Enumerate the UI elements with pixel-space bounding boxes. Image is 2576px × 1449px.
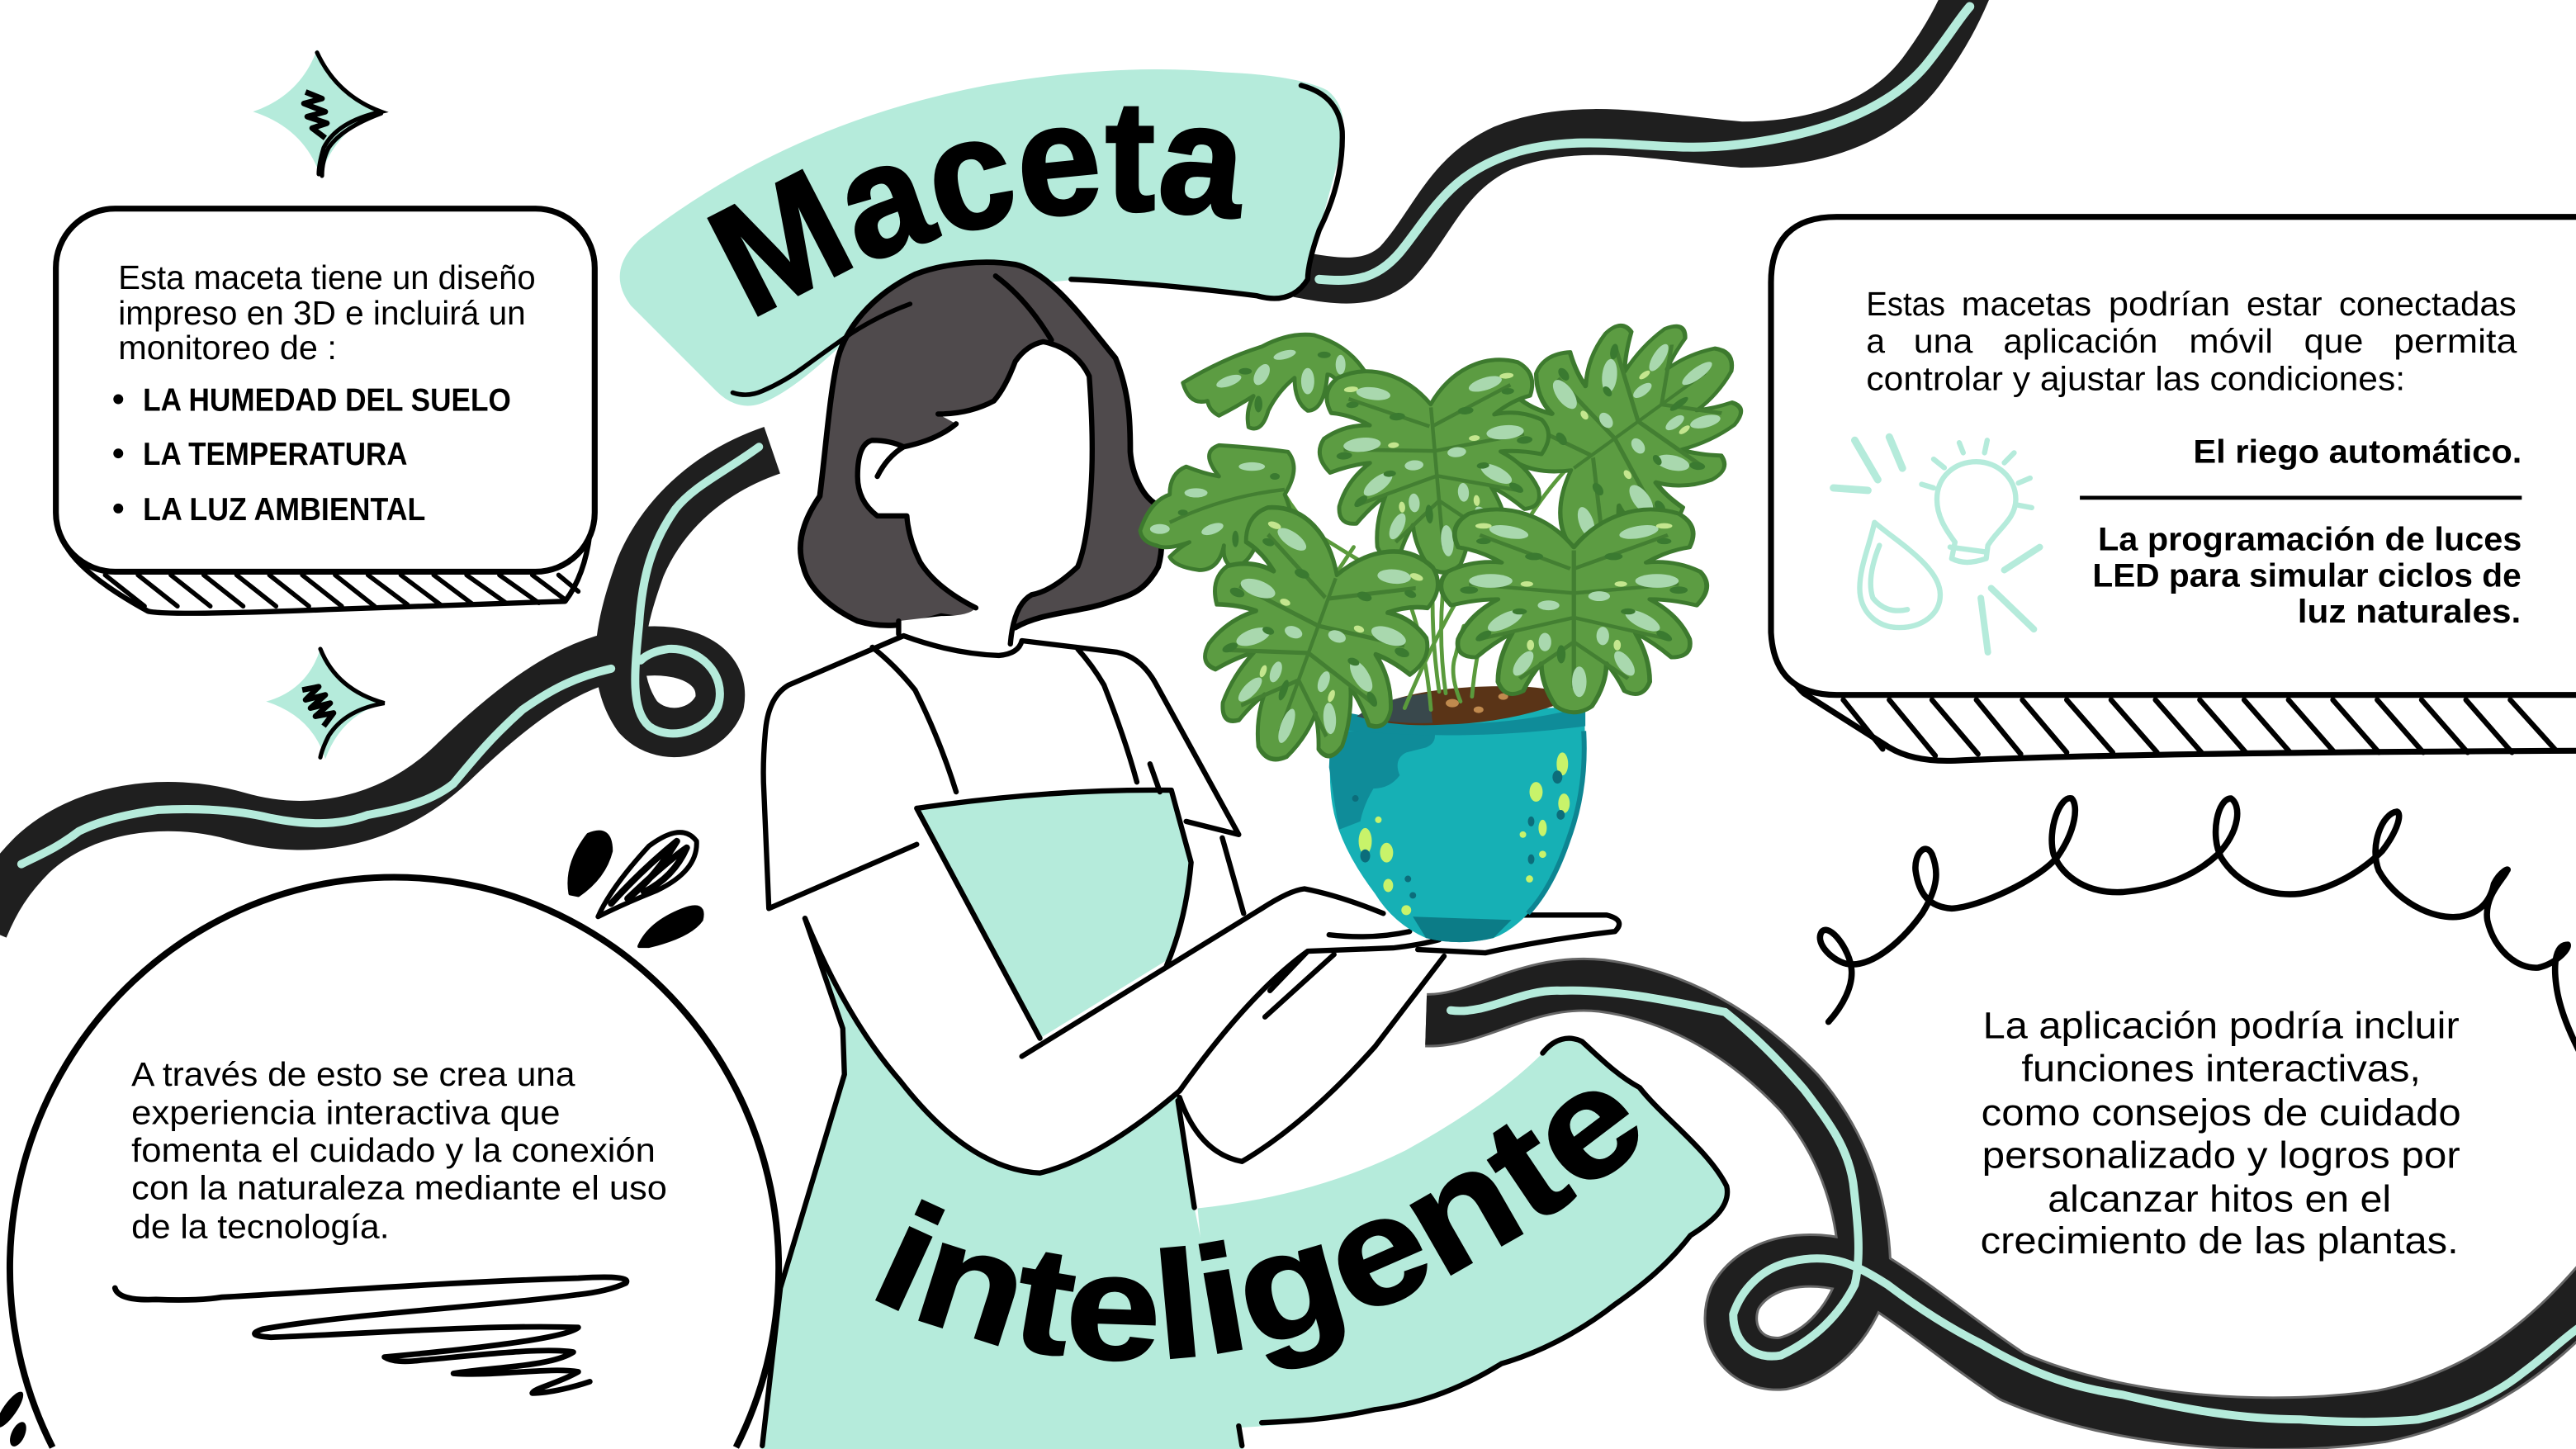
right arm fill [1180, 953, 1444, 1162]
text: app features: La aplicación podría incluir [1983, 1005, 2460, 1047]
title word: inteligente: inteligente [875, 1091, 1638, 1369]
text: circle paragraph: experiencia interactiva que [131, 1094, 561, 1132]
text: left box intro: Esta maceta tiene un diseño [118, 258, 536, 296]
shirt and arm lines [764, 636, 1243, 913]
scribble underline [115, 1277, 627, 1393]
apron [760, 918, 1243, 1449]
list: monitoring items: LA TEMPERATURA [143, 437, 407, 472]
leaf: middle left [1140, 445, 1294, 570]
star: top [253, 50, 381, 176]
face [858, 342, 1092, 652]
leaf: top left [1183, 334, 1364, 429]
banner line over hair [732, 304, 910, 395]
text: LED lights: La programación de luces [2098, 522, 2522, 558]
text: left box intro [118, 258, 536, 367]
list: monitoring items: LA LUZ AMBIENTAL [143, 492, 425, 528]
ribbon: left with loop [0, 447, 772, 928]
stems [1285, 370, 1569, 710]
text: app features: personalizado y logros por [1982, 1134, 2460, 1177]
hair and face lines [858, 276, 1092, 644]
leaf: top right [1474, 272, 1790, 580]
text: circle paragraph: de la tecnología. [131, 1207, 390, 1245]
ribbon: top right [1298, 0, 1970, 281]
text: right box intro: una [1914, 322, 1973, 360]
pot [1329, 707, 1585, 942]
bib [916, 790, 1191, 1042]
panel: circle text [10, 877, 779, 1447]
text: circle paragraph: A través de esto se crea una [131, 1055, 575, 1093]
panel: left box [56, 209, 594, 613]
apron lines [762, 790, 1242, 1446]
leaf: lower left [1166, 495, 1456, 796]
hair [800, 263, 1162, 627]
soil [1357, 686, 1570, 725]
text: irrigation: El riego automático. [2193, 434, 2522, 471]
text: circle paragraph [131, 1055, 667, 1245]
leaf: center [1313, 356, 1560, 582]
text: LED lights [2092, 522, 2522, 630]
text: right box intro: podrían [2109, 285, 2230, 323]
text: right box intro: aplicación [2003, 322, 2157, 360]
text: right box intro: que [2304, 322, 2363, 360]
box base hatch [1781, 654, 2576, 760]
leaf: lower right [1441, 509, 1707, 713]
curly line [1820, 798, 2576, 1051]
arm fill [805, 808, 1619, 1173]
banner: Maceta [619, 69, 1345, 406]
text: right box intro: Estas [1866, 285, 1945, 323]
title word: Maceta: Maceta [707, 106, 1242, 317]
dash accents above circle [569, 832, 703, 946]
star: lower [266, 649, 385, 759]
text: LED lights: LED para simular ciclos de [2092, 557, 2522, 594]
text: right box intro: permita [2394, 322, 2517, 360]
text: right box intro: estar [2247, 285, 2323, 323]
text: app features: crecimiento de las plantas. [1981, 1219, 2459, 1262]
text: app features: funciones interactivas, [2021, 1047, 2421, 1089]
text: app features [1981, 1005, 2461, 1262]
text: right box intro: a [1866, 322, 1885, 360]
divider [2080, 497, 2522, 499]
text: left box intro: impreso en 3D e incluirá un [118, 294, 526, 332]
text: LED lights: luz naturales. [2298, 594, 2521, 630]
text: circle paragraph: fomenta el cuidado y la conexión [131, 1131, 656, 1169]
icon: bulb and drop [1834, 437, 2040, 652]
text: right box intro: móvil [2189, 322, 2273, 360]
banner outline: inteligente [1262, 1039, 1727, 1423]
woman figure [730, 259, 1731, 1449]
text: app features: como consejos de cuidado [1982, 1091, 2461, 1134]
text: circle paragraph: con la naturaleza mediante el uso [131, 1169, 667, 1207]
banner: inteligente [1198, 1039, 1727, 1428]
ribbon: bottom right with loop [1426, 985, 2576, 1423]
text: right box intro: controlar y ajustar las condiciones: [1866, 360, 2405, 398]
box base hatch [66, 534, 590, 613]
plant in pot [1140, 272, 1790, 942]
text: left box intro: monitoreo de : [118, 329, 337, 367]
text: right box intro: conectadas [2339, 285, 2517, 323]
text: right box intro: macetas [1962, 285, 2091, 323]
list: monitoring items: LA HUMEDAD DEL SUELO [143, 382, 511, 418]
list: monitoring items [113, 382, 511, 528]
corner marks bottom left [0, 1388, 30, 1449]
panel: right box [1771, 217, 2576, 760]
text: app features: alcanzar hitos en el [2048, 1177, 2391, 1219]
